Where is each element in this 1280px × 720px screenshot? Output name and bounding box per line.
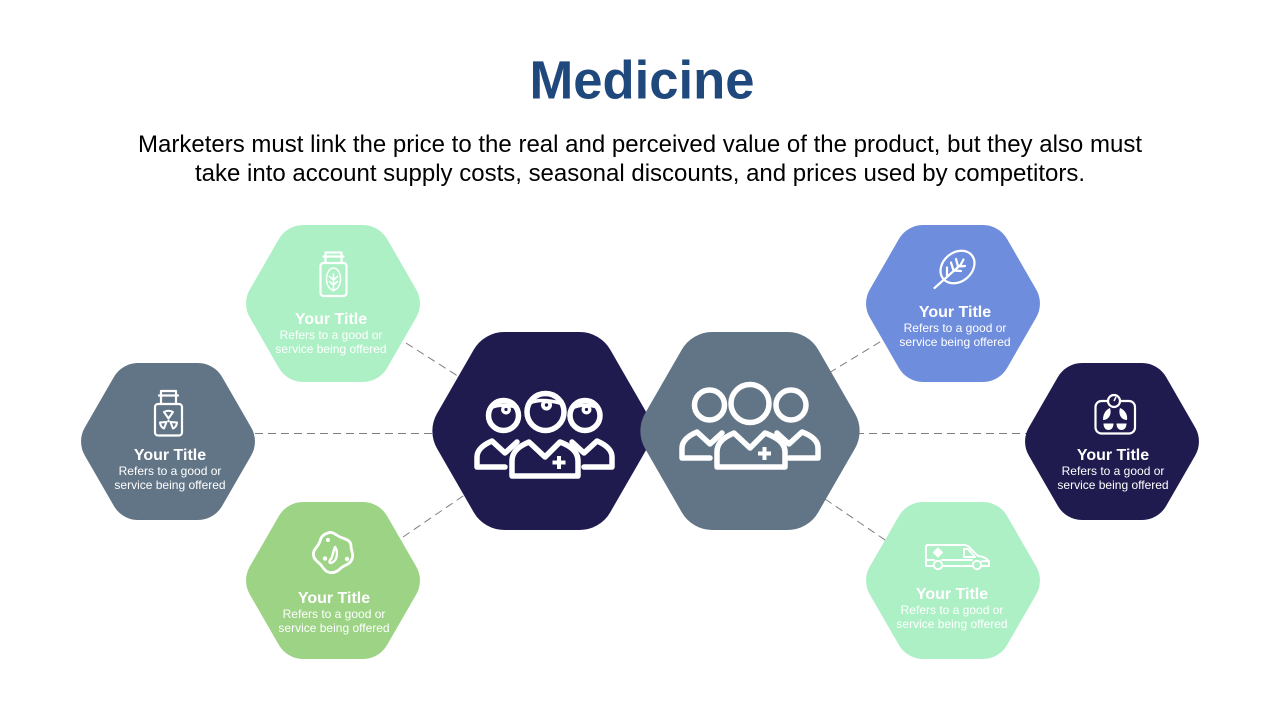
icon: team group [682, 384, 818, 467]
label: right: Your Title [1077, 447, 1149, 464]
label: left: service being offered [114, 478, 226, 492]
label: top right: Refers to a good or [904, 321, 1006, 335]
label: left [114, 447, 226, 492]
icon: leaf [934, 244, 981, 290]
intro text: take into account supply costs, seasonal discounts, and prices used by competitors. [195, 160, 1085, 187]
label: bottom right: service being offered [896, 617, 1008, 631]
label: top right: service being offered [899, 335, 1011, 349]
hexagon: bottom right [866, 502, 1040, 659]
label: bottom left: Refers to a good or [283, 607, 385, 621]
label: top left [275, 311, 387, 356]
title: Medicine [530, 50, 754, 110]
intro text: Marketers must link the price to the real and perceived value of the product, but they also must [138, 131, 1142, 158]
label: right [1057, 447, 1169, 492]
intro text [138, 131, 1142, 187]
center hexagon: team [640, 332, 860, 530]
dashed connectors [255, 337, 1028, 542]
label: bottom left: Your Title [298, 590, 370, 607]
label: top left: Your Title [295, 311, 367, 328]
label: bottom left: service being offered [278, 621, 390, 635]
label: bottom right: Your Title [916, 586, 988, 603]
icon: scale with footprints [1096, 395, 1135, 434]
icon: leaf bottle [320, 252, 346, 296]
label: top left: service being offered [275, 342, 387, 356]
hexagon: top left [246, 225, 420, 382]
hexagon: right [1025, 363, 1199, 520]
label: bottom right [896, 586, 1008, 631]
icon: doctors group [477, 394, 612, 476]
label: right: service being offered [1057, 478, 1169, 492]
label: top right [899, 304, 1011, 349]
label: top right: Your Title [919, 304, 991, 321]
icon: ambulance van [926, 545, 989, 569]
center hexagon: doctors [432, 332, 652, 530]
label: top left: Refers to a good or [280, 328, 382, 342]
label: bottom right: Refers to a good or [901, 603, 1003, 617]
label: left: Refers to a good or [119, 464, 221, 478]
hexagon: bottom left [246, 502, 420, 659]
icon: radiation bottle [155, 391, 182, 436]
icon: bacteria [313, 532, 353, 573]
label: bottom left [278, 590, 390, 635]
hexagon: top right [866, 225, 1040, 382]
label: left: Your Title [134, 447, 206, 464]
label: right: Refers to a good or [1062, 464, 1164, 478]
hexagon: left [81, 363, 255, 520]
